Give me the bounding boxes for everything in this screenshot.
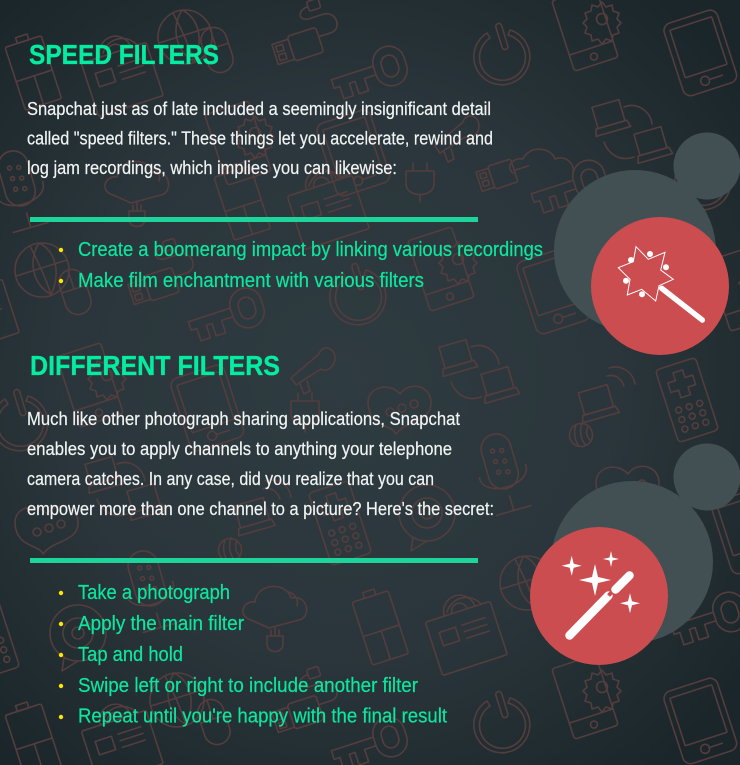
bullet list: different filters: Apply the main filter [78, 613, 244, 635]
bullet list: different filters: Take a photograph [78, 582, 230, 604]
heading: speed filters: SPEED FILTERS [29, 39, 219, 70]
icon: star wand badge [554, 132, 740, 355]
panel: different filters [27, 350, 494, 728]
text block: speed filters intro: called "speed filters." These things let you accelerate, rewind and [27, 128, 493, 148]
divider rule [30, 558, 478, 563]
text block: different filters intro: Much like other photograph sharing applications, Snapchat [27, 408, 460, 429]
divider rule [30, 217, 478, 222]
panel: speed filters [27, 39, 543, 292]
text block: speed filters intro: Snapchat just as of late included a seemingly insignificant detail [27, 98, 491, 119]
bullet list: different filters [59, 582, 447, 728]
bullet list: different filters: Repeat until you're happy with the final result [78, 706, 447, 728]
bullet list: speed filters: Create a boomerang impact by linking various recordings [78, 239, 543, 261]
text block: different filters intro [27, 408, 494, 519]
bullet list: different filters: Swipe left or right to include another filter [78, 675, 418, 697]
text block: speed filters intro [27, 98, 493, 178]
heading: different filters: DIFFERENT FILTERS [30, 350, 280, 381]
bullet list: speed filters: Make film enchantment with various filters [78, 270, 424, 292]
bullet list: speed filters [59, 239, 543, 292]
text block: different filters intro: camera catches. In any case, did you realize that you can [27, 468, 434, 489]
text block: speed filters intro: log jam recordings, which implies you can likewise: [27, 157, 397, 178]
text block: different filters intro: enables you to apply channels to anything your telephone [27, 438, 452, 459]
text block: different filters intro: empower more than one channel to a picture? Here's the secret: [27, 498, 494, 519]
icon: sparkle wand badge [530, 444, 740, 665]
bullet list: different filters: Tap and hold [78, 644, 183, 666]
